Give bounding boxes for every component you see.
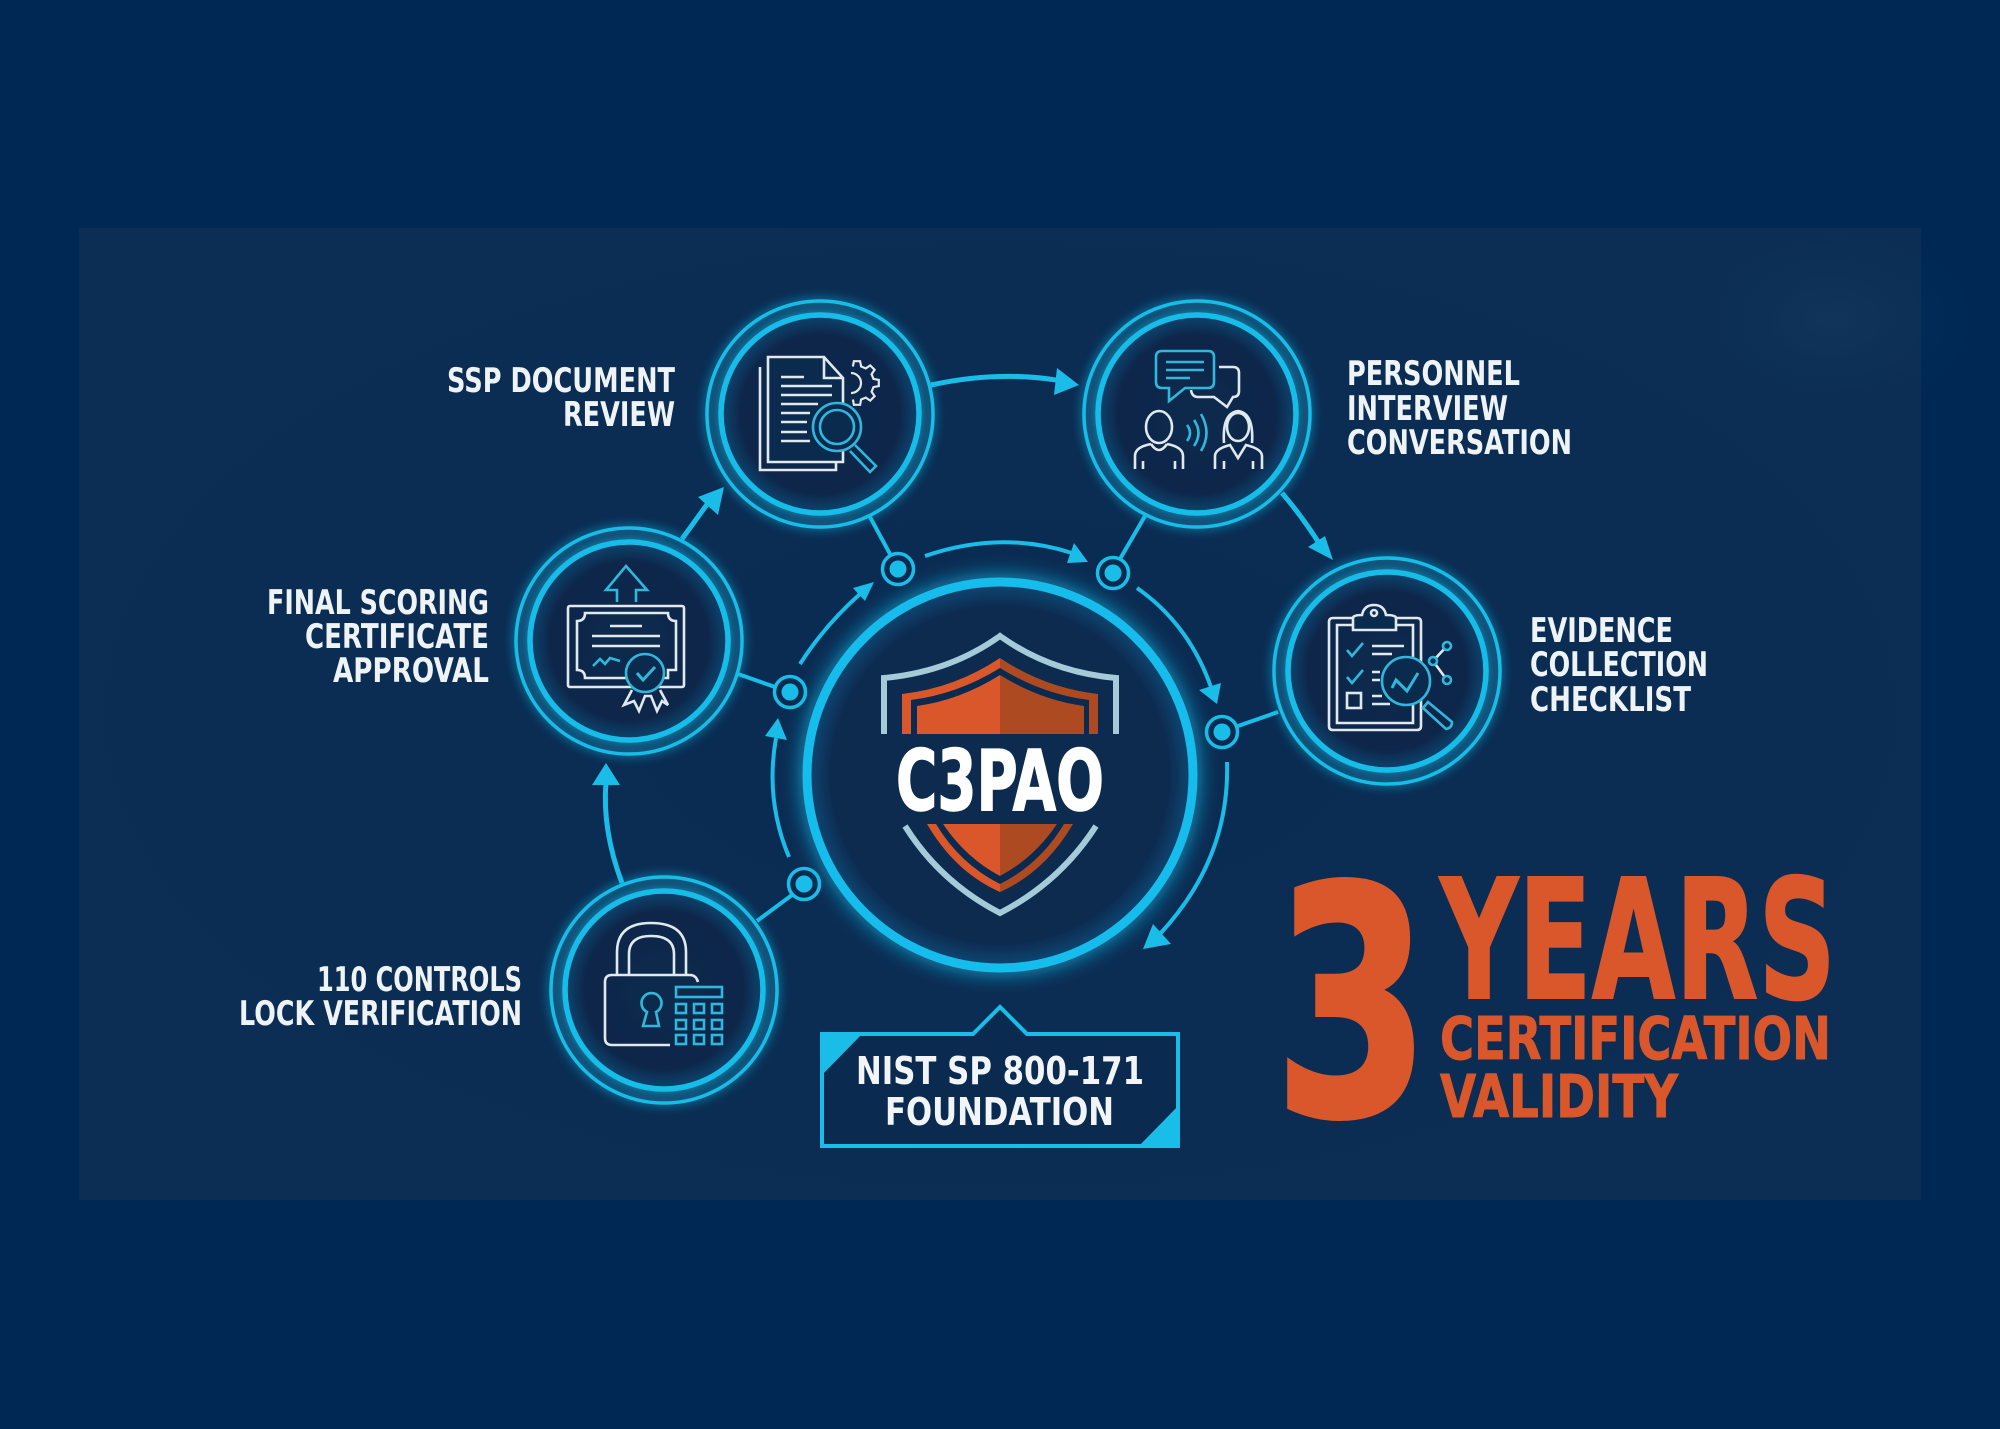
icon: conversation xyxy=(1135,351,1262,469)
icon: certificate with arrow xyxy=(568,566,684,711)
label: final scoring certificate approval: CERTIFICATE xyxy=(305,617,489,657)
arrow: inner upper right xyxy=(1137,588,1221,704)
corner accent bottom right xyxy=(1137,1104,1180,1148)
label: personnel interview conversation xyxy=(1347,354,1572,463)
label: evidence collection checklist: COLLECTION xyxy=(1530,645,1708,685)
shield: navy band bottom xyxy=(936,824,1064,884)
arrows: inner cycle xyxy=(765,542,1227,949)
label: 110 controls lock verification: LOCK VERIFICATION xyxy=(239,994,522,1034)
arrow: final scoring to SSP xyxy=(682,487,724,539)
arrow: inner lower left xyxy=(765,718,789,857)
label: evidence collection checklist: EVIDENCE xyxy=(1530,611,1673,651)
ring xyxy=(551,877,777,1103)
step: SSP document review xyxy=(707,301,933,527)
ring xyxy=(516,528,742,754)
ring xyxy=(707,301,933,527)
shield: lower left xyxy=(927,824,1000,892)
arrow: inner lower right xyxy=(1143,762,1227,949)
arrows: outer cycle xyxy=(592,368,1333,883)
label: 110 controls lock verification xyxy=(239,960,522,1034)
label: SSP document review xyxy=(447,361,676,435)
CERTIFICATION: CERTIFICATION xyxy=(1440,1004,1831,1073)
callout text xyxy=(856,1049,1144,1134)
callout: NIST SP 800-171 foundation xyxy=(820,1007,1180,1148)
callout frame xyxy=(822,1007,1178,1146)
shield: silver outline xyxy=(884,636,1116,913)
stat: 3 years certification validity xyxy=(1274,821,1836,1189)
shield xyxy=(884,636,1116,913)
shield: inner left xyxy=(917,675,1000,734)
ring xyxy=(1274,558,1500,784)
central ring xyxy=(807,582,1193,968)
arrow: personnel to evidence xyxy=(1282,493,1333,560)
shield: outer orange left xyxy=(902,658,1000,734)
label: evidence collection checklist xyxy=(1530,611,1708,720)
step: evidence collection xyxy=(1274,558,1500,784)
arrow: inner upper left xyxy=(800,582,874,664)
step: personnel interview xyxy=(1084,301,1310,527)
shield: navy band top xyxy=(911,668,1089,734)
label: personnel interview conversation: PERSONNEL xyxy=(1347,354,1520,394)
callout text: FOUNDATION xyxy=(885,1090,1114,1134)
icon: document with magnifier and gear xyxy=(760,357,879,472)
shield: inner right xyxy=(1000,675,1084,734)
label: final scoring certificate approval: APPROVAL xyxy=(333,651,489,691)
label: SSP document review: SSP DOCUMENT xyxy=(447,361,676,401)
big number 3: 3 xyxy=(1274,821,1430,1189)
label: SSP document review: REVIEW xyxy=(563,395,675,435)
corner accent top left xyxy=(820,1032,864,1077)
shield: outer orange right xyxy=(1000,658,1098,734)
step: 110 controls lock xyxy=(551,877,777,1103)
center label C3PAO: C3PAO xyxy=(896,732,1104,830)
connector lines xyxy=(738,516,1278,921)
shield: lower right xyxy=(1000,824,1073,892)
icon: clipboard with chart xyxy=(1329,605,1452,730)
panel: main dark background xyxy=(79,210,2000,1200)
arrow: lock to final scoring xyxy=(592,763,622,883)
ring xyxy=(1084,301,1310,527)
callout text: NIST SP 800-171 xyxy=(856,1049,1144,1093)
step: final scoring certificate xyxy=(516,528,742,754)
VALIDITY: VALIDITY xyxy=(1440,1062,1679,1131)
arrow: SSP to personnel xyxy=(931,368,1079,395)
icon: padlock with keypad xyxy=(605,923,722,1045)
label: final scoring certificate approval xyxy=(267,583,489,691)
label: final scoring certificate approval: FINAL SCORING xyxy=(267,583,489,623)
label: personnel interview conversation: CONVERSATION xyxy=(1347,423,1572,463)
label: personnel interview conversation: INTERVIEW xyxy=(1347,389,1508,429)
node dots xyxy=(774,554,1238,900)
arrow: inner top xyxy=(925,542,1088,563)
label: evidence collection checklist: CHECKLIST xyxy=(1530,680,1692,720)
label: 110 controls lock verification: 110 CONTROLS xyxy=(317,960,522,1000)
